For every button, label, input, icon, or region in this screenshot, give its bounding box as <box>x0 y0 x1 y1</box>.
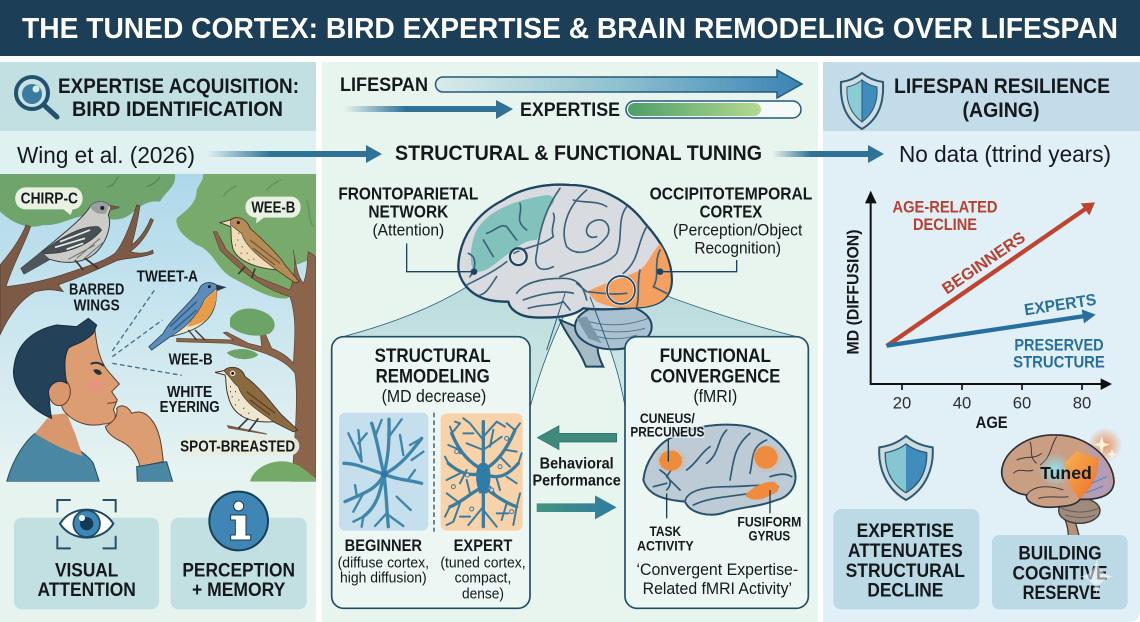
label: occipitotemporal cortex: (Perception/Object <box>673 221 803 240</box>
caption: beginner: BEGINNER <box>345 537 422 555</box>
x axis label: AGE <box>976 414 1008 432</box>
label: preserved structure <box>1013 336 1105 372</box>
label: occipitotemporal cortex: CORTEX <box>700 202 762 222</box>
card: cognitive reserve <box>992 535 1128 609</box>
citation: Wing et al. (2026) <box>17 142 195 168</box>
panel heading: BIRD IDENTIFICATION <box>72 98 283 121</box>
label: experts: EXPERTS <box>1023 291 1098 319</box>
heading <box>894 75 1110 122</box>
label: task activity <box>637 523 694 553</box>
caption: expert: (tuned cortex, <box>440 554 526 571</box>
label: behavioral performance: Performance <box>532 472 621 489</box>
caption: beginner <box>338 537 429 587</box>
label: cuneus precuneus <box>630 411 704 439</box>
right tree canopy <box>177 174 316 298</box>
panel heading <box>58 75 299 121</box>
axes <box>865 191 1112 390</box>
person <box>7 318 173 482</box>
leader line: occipitotemporal <box>657 260 737 275</box>
caption: convergent activity: Related fMRI Activity’ <box>643 579 792 598</box>
brain stem and cerebellum <box>560 304 652 367</box>
gaze dashed lines <box>112 289 182 375</box>
title banner <box>0 0 1140 56</box>
bird: brown wee-b <box>220 218 299 283</box>
label: frontoparietal network: (Attention) <box>372 221 444 240</box>
icon: tuned brain: Tuned <box>1040 463 1092 483</box>
heading <box>375 346 491 406</box>
bottom cards: skills <box>14 492 307 609</box>
label: white eyering: EYERING <box>160 399 220 416</box>
card: expertise attenuates decline: ATTENUATES <box>848 540 963 562</box>
chart: MD diffusion by age <box>845 191 1112 432</box>
line: experts <box>887 309 1096 346</box>
label: preserved structure: PRESERVED <box>1014 336 1104 354</box>
diagram: expert neuron <box>441 413 523 531</box>
card: visual attention: ATTENTION <box>37 580 136 601</box>
icon: magnifying glass <box>16 77 57 117</box>
no data note: No data (ttrind years) <box>899 141 1111 167</box>
main brain diagram <box>338 184 812 367</box>
card: expertise attenuates decline <box>833 436 979 609</box>
card: perception and memory: PERCEPTION <box>182 560 295 581</box>
caption: expert: EXPERT <box>454 537 512 555</box>
label: barred wings: BARRED <box>69 281 124 298</box>
card: visual attention: VISUAL <box>55 560 119 581</box>
lifespan timeline: LIFESPAN <box>340 74 428 96</box>
teal frontoparietal region <box>471 195 554 272</box>
orange occipitotemporal region <box>587 244 671 308</box>
caption: beginner: (diffuse cortex, <box>338 554 429 571</box>
heading: (fMRI) <box>693 386 737 406</box>
speech bubble: wee-b <box>245 197 301 223</box>
left tree branch <box>0 205 153 335</box>
x axis ticks: 80 <box>1073 393 1091 412</box>
funnel: zoom connectors <box>343 273 797 410</box>
sulci <box>467 188 667 310</box>
left tree canopy <box>0 174 175 227</box>
caption: convergent activity: ‘Convergent Expertise- <box>636 560 798 579</box>
card: expertise attenuates decline: STRUCTURAL <box>846 560 965 582</box>
caption: expert: dense) <box>462 585 504 602</box>
label: behavioral performance <box>532 455 621 489</box>
label: age-related decline <box>892 198 998 234</box>
label: age-related decline: DECLINE <box>913 216 977 234</box>
leader line: frontoparietal <box>407 243 477 275</box>
panel: structural remodeling <box>332 337 530 608</box>
heading: CONVERGENCE <box>650 366 780 387</box>
label: frontoparietal network: FRONTOPARIETAL <box>338 184 478 204</box>
illustration: birder watching birds <box>0 174 316 482</box>
card: cognitive reserve: COGNITIVE <box>1012 563 1107 585</box>
label: spot-breasted: SPOT-BREASTED <box>180 438 295 455</box>
ground bush <box>250 461 316 482</box>
x axis ticks: 20 <box>893 393 911 412</box>
arrow: function to structure <box>537 426 617 450</box>
right bottom cards <box>833 428 1128 609</box>
x axis ticks <box>893 393 1091 412</box>
bird: bluebird tweet-a <box>149 283 225 350</box>
speech bubble: chirp-c <box>15 187 83 215</box>
title banner: THE TUNED CORTEX: BIRD EXPERTISE & BRAIN REMODELING OVER LIFESPAN <box>22 13 1118 45</box>
icon: shield <box>841 73 883 129</box>
label: cuneus precuneus: PRECUNEUS <box>630 424 704 439</box>
y axis label: MD (DIFFUSION) <box>845 229 863 354</box>
x axis ticks: 60 <box>1013 393 1031 412</box>
cerebrum <box>458 185 672 318</box>
caption: expert <box>440 537 526 602</box>
speech bubble: wee-b: WEE-B <box>251 199 295 216</box>
section heading: tuning: STRUCTURAL & FUNCTIONAL TUNING <box>395 141 762 165</box>
card: cognitive reserve: RESERVE <box>1023 582 1101 604</box>
label: occipitotemporal cortex <box>650 184 812 257</box>
label: white eyering: WHITE <box>167 384 212 401</box>
arrow: tuning to no data <box>772 145 884 163</box>
label: fusiform gyrus: FUSIFORM <box>737 513 801 529</box>
heading: LIFESPAN RESILIENCE <box>894 75 1110 98</box>
label: frontoparietal network: NETWORK <box>368 202 448 222</box>
label: barred wings <box>70 284 124 310</box>
card: expertise attenuates decline: EXPERTISE <box>857 520 954 542</box>
bird: spot-breasted <box>215 367 298 432</box>
label: age-related decline: AGE-RELATED <box>892 198 998 216</box>
panel: expertise acquisition <box>0 62 316 622</box>
right tree trunk <box>177 232 316 482</box>
label: task activity: ACTIVITY <box>637 537 694 553</box>
heading <box>650 346 780 406</box>
line: beginners <box>887 202 1095 346</box>
card: visual attention <box>14 500 159 609</box>
label: occipitotemporal cortex: OCCIPITOTEMPORAL <box>650 184 812 204</box>
bird: barred gray <box>21 202 119 274</box>
card: cognitive reserve: BUILDING <box>1018 543 1102 565</box>
x axis ticks: 40 <box>953 393 971 412</box>
label: cuneus precuneus: CUNEUS/ <box>640 411 695 426</box>
heading: (AGING) <box>962 99 1040 122</box>
panel heading: EXPERTISE ACQUISITION: <box>58 75 299 98</box>
label: wee-b: WEE-B <box>169 352 213 369</box>
icon: large shield <box>879 436 933 500</box>
label: frontoparietal network <box>338 184 478 240</box>
label: tweet-a: TWEET-A <box>137 268 198 285</box>
heading: FUNCTIONAL <box>660 346 771 367</box>
diagram: beginner neuron <box>339 413 428 531</box>
label: behavioral performance: Behavioral <box>540 455 614 472</box>
orange focus circle <box>607 276 635 304</box>
label: task activity: TASK <box>649 523 681 539</box>
icon: tuned brain <box>1002 428 1122 537</box>
card: perception and memory <box>171 492 307 609</box>
label: fusiform gyrus: GYRUS <box>748 527 790 543</box>
arrow: citation to tuning <box>207 145 382 163</box>
heading: STRUCTURAL <box>375 346 491 367</box>
card: expertise attenuates decline: DECLINE <box>867 579 943 601</box>
expertise timeline <box>344 99 801 121</box>
label: white eyering <box>160 386 219 412</box>
label: fusiform gyrus <box>737 513 801 543</box>
caption: expert: compact, <box>455 570 511 587</box>
panel: functional convergence <box>625 337 808 608</box>
zoom line through temporal lobe <box>547 293 610 350</box>
lifespan timeline <box>340 70 802 98</box>
panel: center tuning <box>322 62 818 622</box>
speech bubble: chirp-c: CHIRP-C <box>21 191 78 208</box>
heading: (MD decrease) <box>382 386 486 406</box>
caption: beginner: high diffusion) <box>340 570 427 587</box>
label: barred wings: WINGS <box>74 297 120 314</box>
arrow: structure to function <box>537 495 617 519</box>
card: perception and memory: + MEMORY <box>192 580 286 601</box>
diagram: activation brain <box>643 425 795 518</box>
label: preserved structure: STRUCTURE <box>1013 354 1105 372</box>
white focus circle <box>510 248 527 265</box>
caption: convergent activity <box>636 560 798 598</box>
heading: REMODELING <box>376 366 490 387</box>
small foliage clump <box>227 308 275 359</box>
panel: lifespan resilience <box>823 62 1140 622</box>
expertise timeline: EXPERTISE <box>520 99 620 121</box>
label: beginners: BEGINNERS <box>939 228 1029 298</box>
label: occipitotemporal cortex: Recognition) <box>694 238 781 257</box>
